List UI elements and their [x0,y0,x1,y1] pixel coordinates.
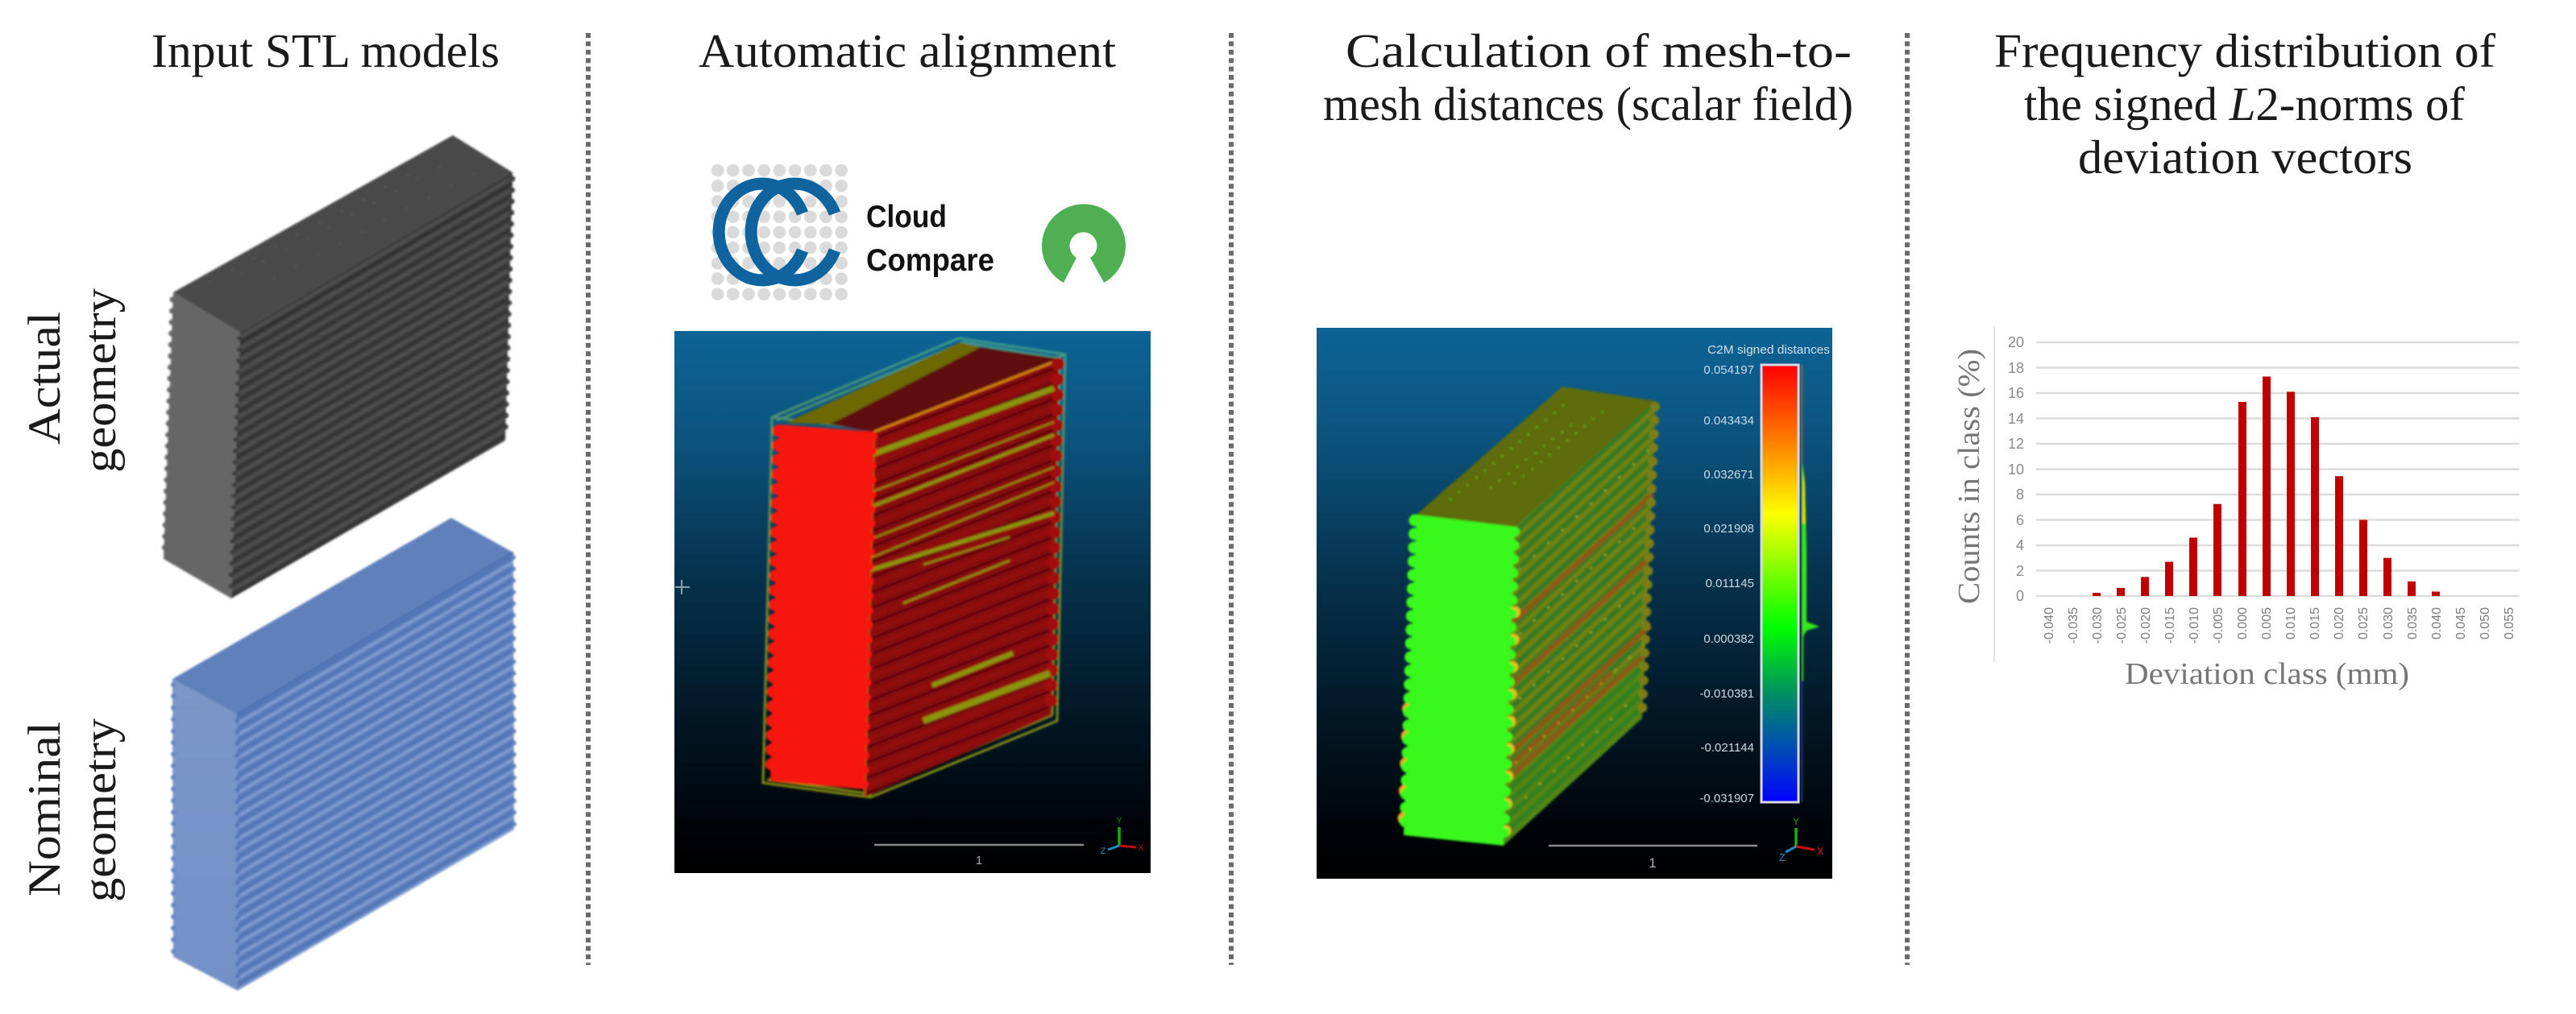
logo wordmark: Cloud [866,200,947,234]
y axis tick labels [2008,334,2024,604]
label: nominal geometry: geometry [75,718,126,902]
x axis tick labels: -0.030 [2091,607,2105,644]
y axis tick labels: 18 [2008,360,2024,376]
x axis tick labels: 0.035 [2406,607,2420,639]
color scale tick labels: 0.011145 [1706,577,1754,590]
title: calculation of distances [1323,24,1853,130]
x axis tick labels [2043,607,2516,644]
x axis tick labels: 0.040 [2430,607,2444,639]
axis triad: X [1817,845,1824,857]
scale bar: 1 [976,854,982,867]
axis triad [1779,816,1824,863]
label: actual geometry [19,288,126,473]
y axis tick labels: 6 [2016,512,2024,528]
viewport crosshair [675,580,690,594]
color scale tick labels: -0.021144 [1701,741,1754,755]
viewport background [674,331,1151,873]
gridlines [2036,342,2520,596]
y axis tick labels: 16 [2008,385,2024,401]
x axis tick labels: 0.030 [2382,607,2396,639]
title: frequency distribution: Frequency distribution of [1994,24,2495,77]
scale bar: 1 [1649,855,1657,871]
label: actual geometry: geometry [75,288,126,473]
x axis tick labels: -0.020 [2139,607,2153,644]
axis triad: Y [1117,817,1122,826]
label: actual geometry: Actual [19,312,70,445]
axis triad: Z [1779,851,1786,863]
title: input STL models: Input STL models [151,24,500,77]
x axis tick labels: 0.045 [2454,607,2468,639]
color scale tick labels [1699,363,1754,805]
colored block point cloud [1404,387,1656,846]
color scale tick labels: 0.000382 [1703,632,1754,646]
y axis tick labels: 20 [2008,334,2024,350]
logo: CloudCompare [710,163,994,302]
panel: scalar field screenshot [1317,328,1832,879]
y axis tick labels: 2 [2016,563,2024,579]
icon: open source logo [1042,204,1126,283]
logo wordmark [866,200,994,278]
color scale bar [1761,365,1798,802]
x axis tick labels: 0.000 [2236,607,2250,639]
title: frequency distribution: the signed L2-norms of [2024,77,2465,130]
y axis tick labels: 10 [2008,461,2024,478]
logo wordmark: Compare [866,243,994,278]
x axis tick labels: 0.055 [2503,607,2516,639]
x axis tick labels: 0.020 [2333,607,2346,639]
x axis tick labels: -0.040 [2043,607,2056,644]
title: automatic alignment: Automatic alignment [699,24,1117,77]
bounding box back lines [763,338,1065,797]
color scale title: C2M signed distances [1707,343,1830,357]
axis triad: Z [1101,846,1106,856]
logo double C rings [719,184,835,280]
axis triad: Y [1793,816,1799,827]
histogram bars [2093,377,2440,596]
color scale tick labels: 0.054197 [1703,363,1754,377]
x axis tick labels: -0.010 [2188,607,2201,644]
x axis tick labels: -0.025 [2115,607,2129,644]
aligned block point cloud [763,338,1065,797]
viewport background [1317,328,1832,879]
panel: alignment screenshot [674,331,1151,873]
label: nominal geometry: Nominal [19,722,70,896]
logo dot grid [710,163,849,302]
title: frequency distribution: deviation vectors [2078,130,2412,184]
x axis tick labels: -0.035 [2067,607,2080,644]
y axis tick labels: 4 [2016,537,2024,553]
y axis tick labels: 14 [2008,411,2024,427]
title: frequency distribution [1994,24,2495,184]
x axis tick labels: -0.005 [2212,607,2225,644]
x axis tick labels: 0.015 [2308,607,2322,639]
color scale tick labels: 0.043434 [1703,414,1754,428]
axis triad [1101,817,1144,856]
model: nominal geometry blue block [172,518,514,991]
x axis title: Deviation class (mm) [2125,657,2409,691]
color scale tick labels: -0.031907 [1699,792,1754,805]
color scale tick labels: 0.021908 [1703,522,1754,536]
chart: deviation frequency distribution [1952,326,2520,691]
title: calculation of distances: Calculation of mesh-to- [1346,24,1852,77]
x axis tick labels: 0.050 [2479,607,2492,639]
scalar histogram sidebar [1802,365,1819,802]
y axis tick labels: 0 [2016,588,2024,604]
color scale tick labels: -0.010381 [1699,687,1754,701]
x axis tick labels: 0.025 [2357,607,2371,639]
x axis tick labels: -0.015 [2163,607,2177,644]
title: calculation of distances: mesh distances (scalar field) [1323,77,1853,130]
y axis title: Counts in class (%) [1952,349,1986,604]
model: actual geometry grey block [164,135,512,598]
color scale tick labels: 0.032671 [1703,468,1754,482]
axis triad: X [1138,843,1144,853]
y axis tick labels: 12 [2008,436,2024,452]
y axis tick labels: 8 [2016,486,2024,503]
x axis tick labels: 0.005 [2260,607,2274,639]
x axis tick labels: 0.010 [2284,607,2298,639]
label: nominal geometry [19,718,126,902]
